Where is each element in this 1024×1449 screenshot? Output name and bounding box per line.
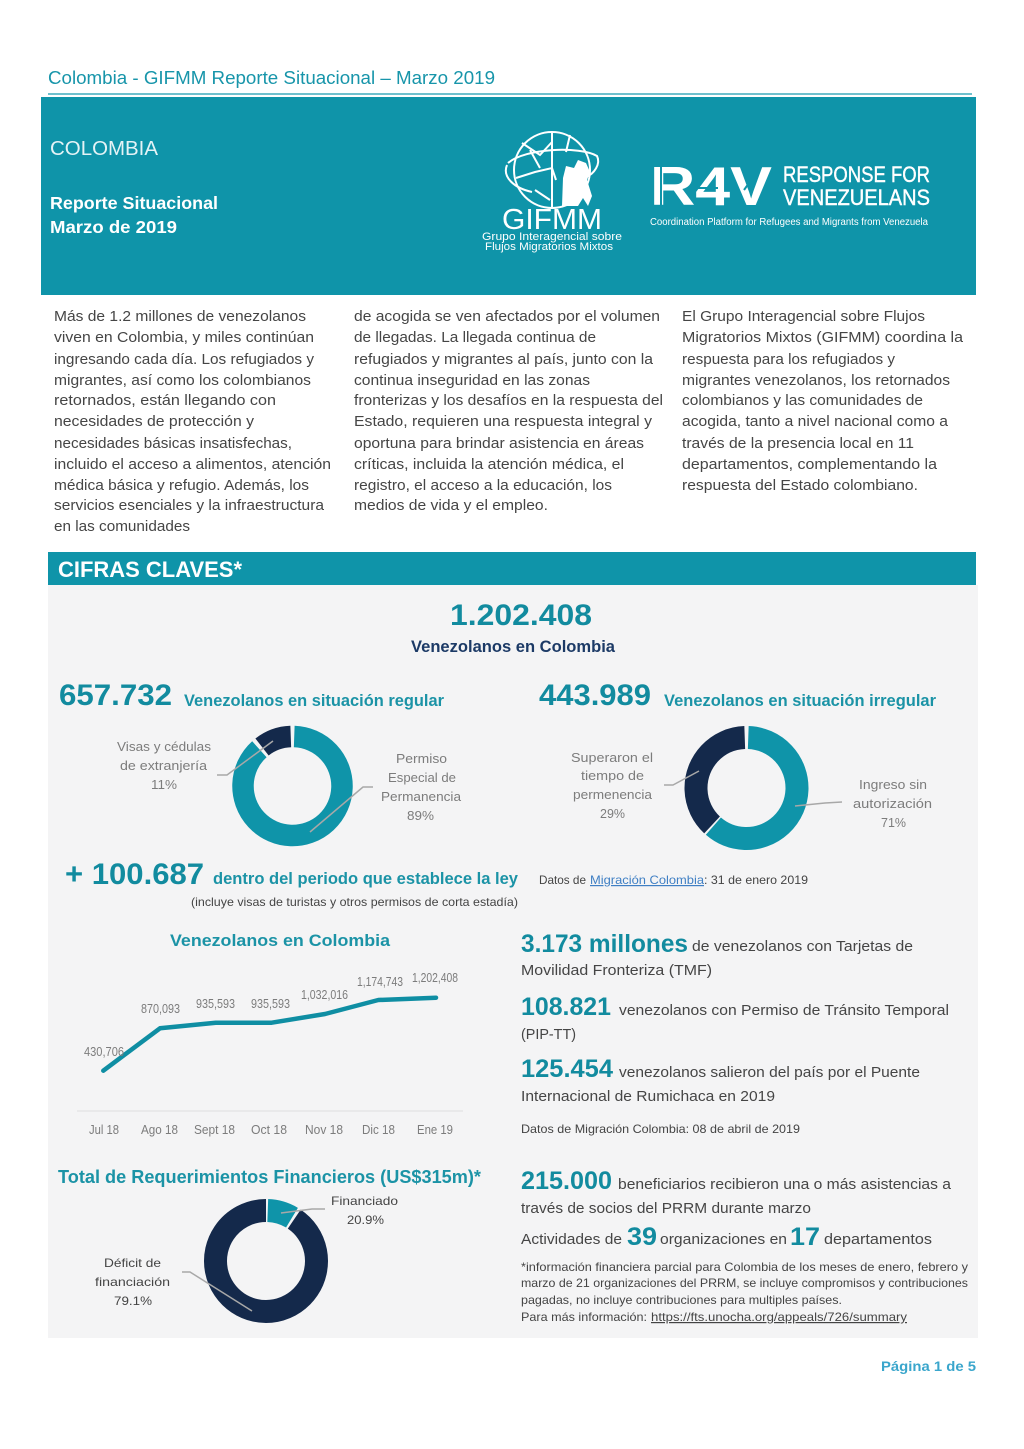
intro column 3: Migratorios Mixtos (GIFMM) coordina la <box>682 330 964 346</box>
donut chart: requerimientos financieros: Financiado <box>331 1194 398 1208</box>
line chart: venezolanos en colombia: Nov 18 <box>305 1123 343 1137</box>
figure: situación irregular <box>539 679 937 712</box>
figure: situación regular <box>59 679 445 712</box>
donut chart: requerimientos financieros <box>95 1191 398 1331</box>
line chart: venezolanos en colombia <box>77 931 463 1137</box>
intro column 3: través de la presencia local en 11 <box>682 436 914 452</box>
intro column 1: retornados, están llegando con <box>54 393 276 409</box>
stats: beneficiarios y organizaciones: beneficiarios recibieron una o más asistencias a <box>618 1177 952 1193</box>
intro column 1: Más de 1.2 millones de venezolanos <box>54 309 306 325</box>
header title: COLOMBIA <box>50 138 159 160</box>
header title: Reporte Situacional <box>50 193 218 213</box>
donut chart: requerimientos financieros: financiación <box>95 1275 170 1289</box>
intro column 1: viven en Colombia, y miles continúan <box>54 330 314 346</box>
intro column 2: de llegadas. La llegada continua de <box>354 330 596 346</box>
source note: migración colombia <box>539 873 808 887</box>
heading: cifras claves <box>48 552 976 585</box>
stats: tarjetas y permisos: de venezolanos con Tarjetas de <box>692 939 913 955</box>
intro column 2: medios de vida y el empleo. <box>354 498 548 514</box>
donut chart: situación irregular: permenencia <box>573 788 652 802</box>
intro column 2: oportuna para brindar asistencia en áreas <box>354 436 644 452</box>
stats: tarjetas y permisos: 125.454 <box>521 1055 613 1083</box>
figure: situación regular: Venezolanos en situación regular <box>184 692 445 710</box>
footnote: marzo de 21 organizaciones del PRRM, se incluye compromisos y contribuciones <box>521 1276 968 1290</box>
footnote <box>521 1260 968 1324</box>
intro column 3: respuesta para los refugiados y <box>682 352 896 368</box>
line chart: venezolanos en colombia: 870,093 <box>141 1002 180 1016</box>
stats: tarjetas y permisos <box>521 930 949 1136</box>
footnote: *información financiera parcial para Colombia de los meses de enero, febrero y <box>521 1260 968 1274</box>
donut chart: situación regular: Permanencia <box>381 790 461 804</box>
intro column 1 <box>54 309 331 535</box>
stats: tarjetas y permisos: Movilidad Fronteriza (TMF) <box>521 963 712 979</box>
intro column 2: fronterizas y los desafíos en la respuesta del <box>354 393 663 409</box>
donut chart: situación irregular: Ingreso sin <box>859 778 927 792</box>
line chart: venezolanos en colombia: Oct 18 <box>251 1123 287 1137</box>
stats: beneficiarios y organizaciones: Actividades de <box>521 1232 622 1248</box>
donut chart: situación regular: de extranjería <box>120 759 207 773</box>
donut chart: situación irregular: tiempo de <box>581 769 644 783</box>
stats: beneficiarios y organizaciones: organizaciones en <box>660 1232 787 1248</box>
stats: tarjetas y permisos: (PIP-TT) <box>521 1027 576 1043</box>
total figure <box>411 599 616 656</box>
donut chart: situación regular: Visas y cédulas <box>117 740 211 754</box>
donut chart: situación regular <box>117 717 461 855</box>
source note: migración colombia: Migración Colombia <box>590 873 704 887</box>
footnote: https://fts.unocha.org/appeals/726/summary <box>651 1310 907 1324</box>
footnote: pagadas, no incluye contribuciones para multiples países. <box>521 1293 842 1307</box>
intro column 1: necesidades básicas insatisfechas, <box>54 436 292 452</box>
donut chart: situación irregular: autorización <box>853 797 932 811</box>
stats: tarjetas y permisos: venezolanos salieron del país por el Puente <box>619 1065 920 1081</box>
stats: tarjetas y permisos: Datos de Migración Colombia: 08 de abril de 2019 <box>521 1122 800 1136</box>
figure: situación irregular: Venezolanos en situación irregular <box>664 692 937 710</box>
stats: tarjetas y permisos: Internacional de Rumichaca en 2019 <box>521 1089 775 1105</box>
source note: migración colombia: : 31 de enero 2019 <box>704 873 808 887</box>
donut chart: situación irregular: 71% <box>881 816 906 830</box>
stats: beneficiarios y organizaciones: departamentos <box>824 1232 932 1248</box>
stats: beneficiarios y organizaciones: través de socios del PRRM durante marzo <box>521 1201 811 1217</box>
donut chart: situación irregular: 29% <box>600 807 625 821</box>
panel: cifras claves background <box>48 585 978 1338</box>
figure: dentro del periodo: dentro del periodo que establece la ley <box>213 870 519 888</box>
logo: R4V: RESPONSE FOR <box>783 162 930 187</box>
donut chart: requerimientos financieros: Déficit de <box>104 1256 161 1270</box>
intro column 2: de acogida se ven afectados por el volumen <box>354 309 660 325</box>
header band <box>41 97 976 295</box>
total figure: 1.202.408 <box>450 599 592 632</box>
logo: GIFMM: Flujos Migratorios Mixtos <box>485 241 614 253</box>
figure: dentro del periodo <box>65 858 519 909</box>
intro column 2: críticas, incluida la atención médica, el <box>354 457 624 473</box>
logo: R4V: R4V <box>650 155 772 217</box>
donut chart: situación irregular: Superaron el <box>571 751 653 765</box>
intro column 2: refugiados y migrantes al país, junto con la <box>354 352 654 368</box>
logo: R4V: VENEZUELANS <box>783 185 930 210</box>
donut chart: requerimientos financieros: 79.1% <box>114 1294 152 1308</box>
stats: beneficiarios y organizaciones: 39 <box>627 1223 657 1251</box>
intro column 3: migrantes venezolanos, los retornados <box>682 373 950 389</box>
intro column 2: Estado, requieren una respuesta integral y <box>354 414 653 430</box>
logo: R4V <box>650 155 930 228</box>
intro column 1: médica básica y refugio. Además, los <box>54 478 309 494</box>
intro column 1: necesidades de protección y <box>54 414 255 430</box>
line chart: venezolanos en colombia: Sept 18 <box>194 1123 235 1137</box>
intro column 2: continua inseguridad en las zonas <box>354 373 590 389</box>
line chart: venezolanos en colombia: Dic 18 <box>362 1123 395 1137</box>
line chart: venezolanos en colombia: Jul 18 <box>89 1123 119 1137</box>
line chart: venezolanos en colombia: 1,174,743 <box>357 975 403 989</box>
intro column 1: servicios esenciales y la infraestructura <box>54 498 325 514</box>
stats: tarjetas y permisos: 3.173 millones <box>521 930 688 958</box>
heading: cifras claves: CIFRAS CLAVES* <box>58 557 242 582</box>
footnote: Para más información: <box>521 1310 647 1324</box>
donut chart: situación regular: 11% <box>151 778 177 792</box>
page number: Página 1 de 5 <box>881 1358 976 1374</box>
donut chart: situación irregular <box>571 717 932 859</box>
line chart: venezolanos en colombia: 1,032,016 <box>301 988 348 1002</box>
stats: beneficiarios y organizaciones: 17 <box>790 1223 820 1251</box>
line chart: venezolanos en colombia: 430,706 <box>84 1045 124 1059</box>
heading: requerimientos financieros: Total de Requerimientos Financieros (US$315m)* <box>58 1167 481 1187</box>
intro column 1: migrantes, así como los colombianos <box>54 373 311 389</box>
stats: tarjetas y permisos: venezolanos con Permiso de Tránsito Temporal <box>619 1003 949 1019</box>
logo: GIFMM: Grupo Interagencial sobre <box>482 231 622 243</box>
top title: Colombia - GIFMM Reporte Situacional – Marzo 2019 <box>48 68 495 88</box>
figure: situación regular: 657.732 <box>59 679 172 712</box>
source note: migración colombia: Datos de <box>539 873 586 887</box>
line chart: venezolanos en colombia: Venezolanos en Colombia <box>170 931 391 950</box>
intro column 3: colombianos y las comunidades de <box>682 393 923 409</box>
intro column 3: El Grupo Interagencial sobre Flujos <box>682 309 925 325</box>
intro column 3: departamentos, complementando la <box>682 457 938 473</box>
stats: beneficiarios y organizaciones <box>521 1167 952 1251</box>
intro column 1: ingresando cada día. Los refugiados y <box>54 352 315 368</box>
line chart: venezolanos en colombia: Ene 19 <box>417 1123 453 1137</box>
intro column 3: acogida, tanto a nivel nacional como a <box>682 414 949 430</box>
total figure: Venezolanos en Colombia <box>411 638 616 656</box>
intro column 1: incluido el acceso a alimentos, atención <box>54 457 331 473</box>
figure: dentro del periodo: (incluye visas de turistas y otros permisos de corta estadía) <box>191 895 518 909</box>
intro column 2 <box>354 309 663 514</box>
line chart: venezolanos en colombia: Ago 18 <box>141 1123 178 1137</box>
logo: GIFMM <box>482 132 622 253</box>
donut chart: situación regular: Especial de <box>388 771 456 785</box>
header title: Marzo de 2019 <box>50 217 177 237</box>
donut chart: requerimientos financieros: 20.9% <box>347 1213 384 1227</box>
donut chart: situación regular: Permiso <box>396 752 447 766</box>
figure: dentro del periodo: + 100.687 <box>65 858 204 891</box>
figure: situación irregular: 443.989 <box>539 679 651 712</box>
logo: R4V: Coordination Platform for Refugees and Migrants from Venezuela <box>650 217 928 228</box>
intro column 1: en las comunidades <box>54 519 190 535</box>
logo: GIFMM: GIFMM <box>502 204 602 236</box>
stats: beneficiarios y organizaciones: 215.000 <box>521 1167 612 1195</box>
header title <box>50 138 218 237</box>
intro column 3: respuesta del Estado colombiano. <box>682 478 918 494</box>
donut chart: situación regular: 89% <box>407 809 434 823</box>
intro column 3 <box>682 309 964 494</box>
line chart: venezolanos en colombia: 935,593 <box>251 997 290 1011</box>
intro column 2: registro, el acceso a la educación, los <box>354 478 612 494</box>
stats: tarjetas y permisos: 108.821 <box>521 993 611 1021</box>
line chart: venezolanos en colombia: 935,593 <box>196 997 235 1011</box>
line chart: venezolanos en colombia: 1,202,408 <box>412 971 458 985</box>
